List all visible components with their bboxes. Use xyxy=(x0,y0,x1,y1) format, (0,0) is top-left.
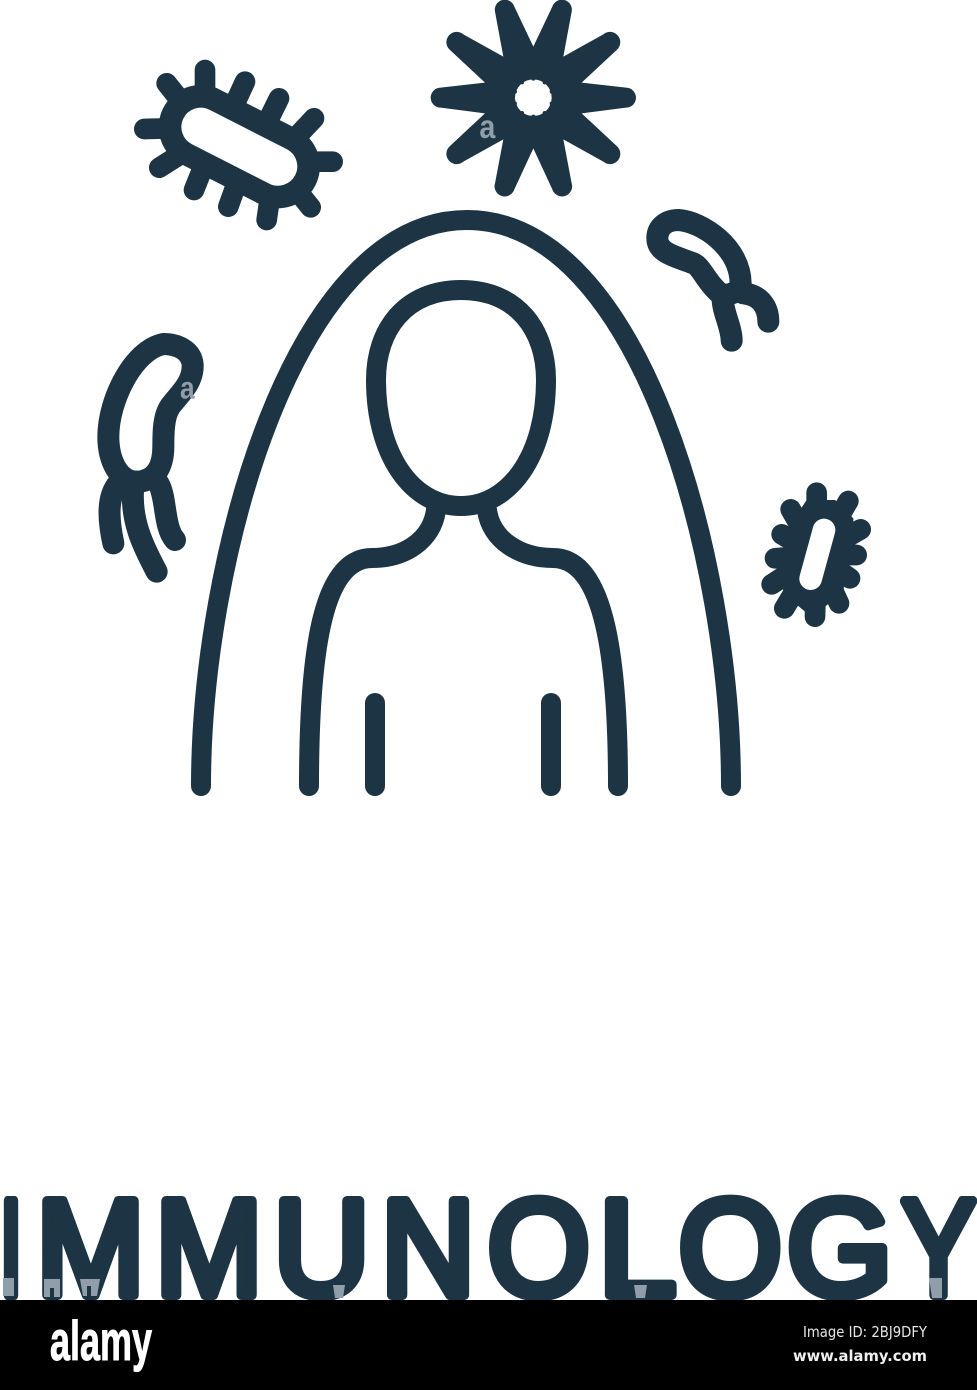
title: M xyxy=(36,1171,145,1324)
icon: star shaped virus, top centre xyxy=(431,0,636,196)
icon: immunology person under dome with pathogens xyxy=(108,0,861,786)
title: I xyxy=(0,1171,23,1324)
watermark fragments on title xyxy=(3,1278,942,1298)
title: G xyxy=(787,1171,892,1324)
footer logo: alamy xyxy=(50,1309,152,1372)
icon: person xyxy=(309,290,618,786)
icon: protective dome xyxy=(201,220,731,786)
title: N xyxy=(381,1171,475,1324)
icon: rod bacterium with spikes, top left xyxy=(144,70,333,220)
title: L xyxy=(598,1171,676,1324)
website: www.alamy.com xyxy=(793,1347,927,1365)
icon: curved bacterium with tails, top right xyxy=(657,220,768,341)
icon: star shaped virus, top centre: a xyxy=(479,109,496,146)
title: M xyxy=(155,1171,263,1324)
icon: flagellated bacterium, left: a xyxy=(180,369,195,405)
title: O xyxy=(679,1171,782,1324)
title: O xyxy=(488,1171,590,1324)
icon: flagellated bacterium, left xyxy=(108,344,195,572)
title: U xyxy=(274,1171,370,1324)
icon: small round bacterium, right xyxy=(772,493,861,617)
footer bar xyxy=(0,1300,977,1390)
image id: Image ID: 2BJ9DFY xyxy=(803,1323,928,1341)
